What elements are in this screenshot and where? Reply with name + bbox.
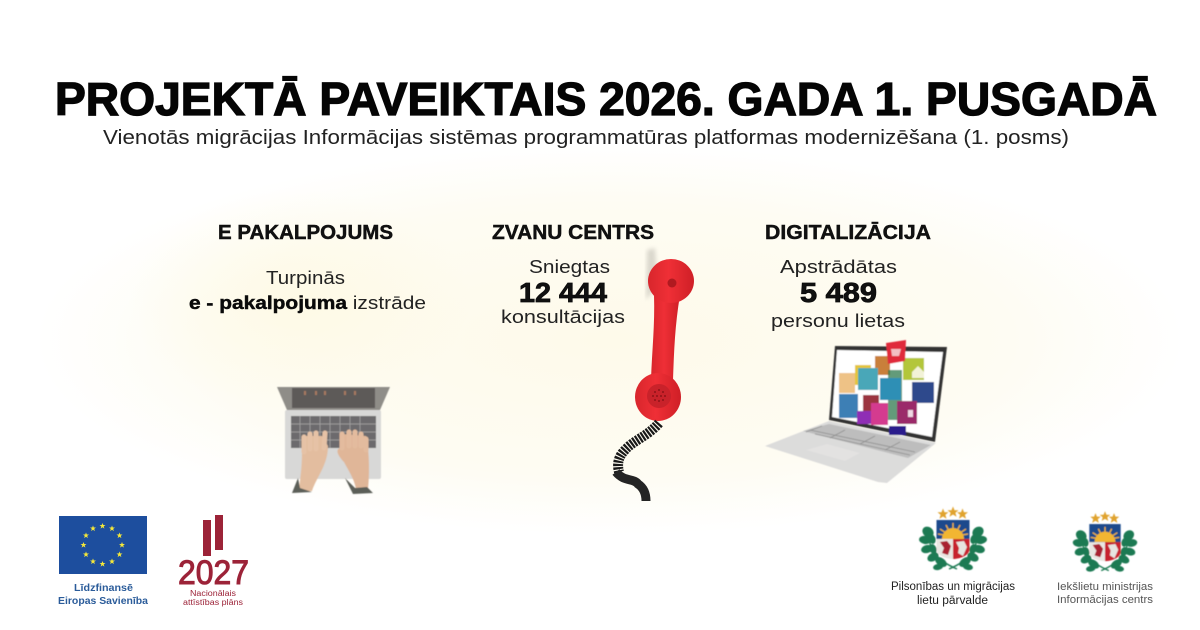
logo: PMLP — [891, 506, 1015, 607]
text block: processed cases — [771, 257, 905, 331]
text: PMLP name: lietu pārvalde — [917, 595, 988, 607]
text: PMLP name: Pilsonības un migrācijas — [891, 581, 1015, 593]
heading: digitalizācija: DIGITALIZĀCIJA — [765, 222, 931, 244]
text: PMLP name — [891, 581, 1015, 607]
text block: e pakalpojums: Turpinās — [266, 268, 345, 288]
text block: processed cases: 5 489 — [800, 277, 877, 308]
text block: sniegtas consultations — [501, 257, 625, 327]
heading: zvanu centrs: ZVANU CENTRS — [492, 222, 654, 244]
text block: e pakalpojums: e - pakalpojuma izstrāde — [189, 293, 426, 313]
text: IeM IC name: Informācijas centrs — [1057, 594, 1154, 606]
icon: laptop with typing hands — [277, 387, 390, 494]
icon: EU flag — [59, 516, 147, 574]
text block: processed cases: Apstrādātas — [780, 257, 897, 277]
text block: processed cases: personu lietas — [771, 311, 905, 331]
text block: e pakalpojums — [189, 268, 426, 313]
panel: e pakalpojums — [189, 222, 426, 494]
text block: sniegtas consultations: 12 444 — [519, 277, 607, 308]
logo: national development plan 2027: Nacionālais — [190, 589, 236, 598]
subtitle: Vienotās migrācijas Informācijas sistēmas programmatūras platformas modernizēšana (1. posms) — [103, 126, 1069, 149]
text: EU caption: Eiropas Savienība — [58, 596, 148, 607]
panel: zvanu centrs — [492, 222, 694, 501]
text block: sniegtas consultations: Sniegtas — [529, 257, 610, 277]
icon: laptop with app icons — [765, 340, 947, 483]
text: EU caption: Līdzfinansē — [74, 583, 133, 594]
logo: national development plan 2027: attīstības plāns — [183, 598, 243, 607]
title: PROJEKTĀ PAVEIKTAIS 2026. GADA 1. PUSGADĀ — [55, 73, 1157, 125]
text: IeM IC name: Iekšlietu ministrijas — [1057, 581, 1154, 593]
logo: IeM IC — [1057, 511, 1154, 606]
text: EU caption — [58, 583, 148, 607]
icon: red telephone handset — [616, 248, 694, 501]
logo: national development plan 2027 — [178, 515, 249, 607]
heading: e pakalpojums: E PAKALPOJUMS — [218, 222, 393, 244]
text block: sniegtas consultations: konsultācijas — [501, 307, 625, 327]
text: IeM IC name — [1057, 581, 1154, 606]
panel: digitalizācija — [765, 222, 947, 483]
logo: EU co-financing — [58, 516, 148, 607]
icon: coat of arms — [918, 506, 988, 571]
logo: national development plan 2027: 2027 — [178, 554, 249, 592]
icon: coat of arms — [1072, 511, 1138, 572]
